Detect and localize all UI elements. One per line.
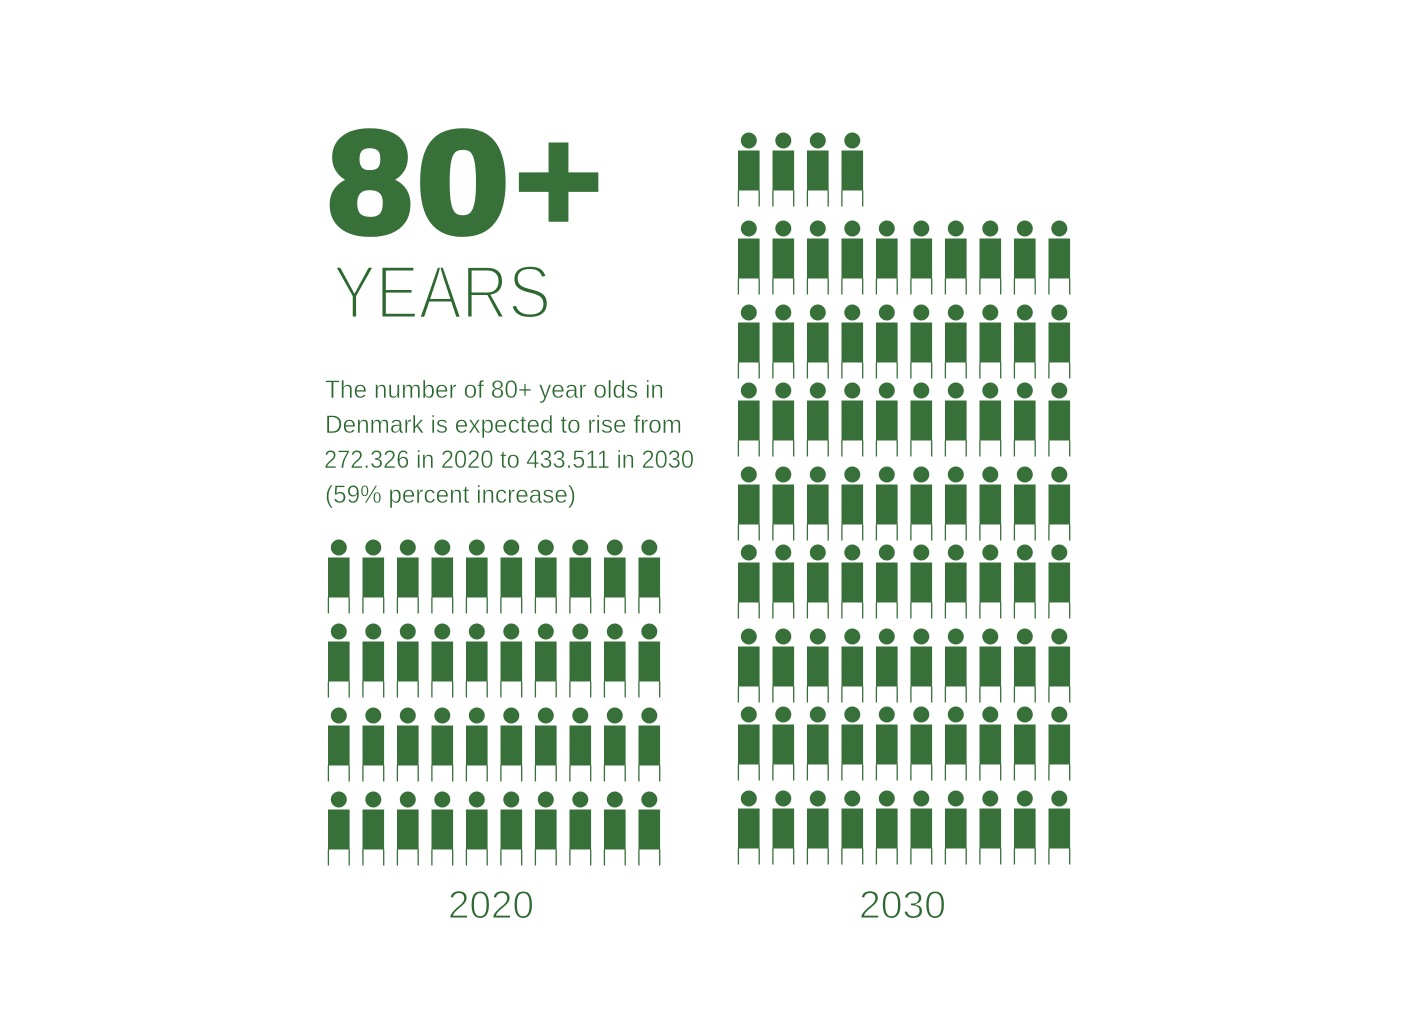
icon chart: 2020 population <box>328 540 660 866</box>
heading: 80+: 8 <box>328 102 412 264</box>
label: 2020: 2020 <box>448 884 534 927</box>
icon chart: 2030 population <box>738 132 1070 864</box>
text block: description: Denmark is expected to rise from <box>325 411 682 439</box>
text block: description: (59% percent increase) <box>325 481 576 509</box>
label: 2030: 2030 <box>859 884 946 927</box>
heading: 80+: + <box>514 96 603 264</box>
text block: description: 272.326 in 2020 to 433.511 in 2030 <box>324 446 694 474</box>
heading: YEARS: YEARS <box>333 250 551 334</box>
text block: description: The number of 80+ year olds in <box>325 376 664 404</box>
heading: 80+ <box>328 96 603 264</box>
text block: description <box>324 376 694 509</box>
heading: 80+: 0 <box>417 102 509 264</box>
